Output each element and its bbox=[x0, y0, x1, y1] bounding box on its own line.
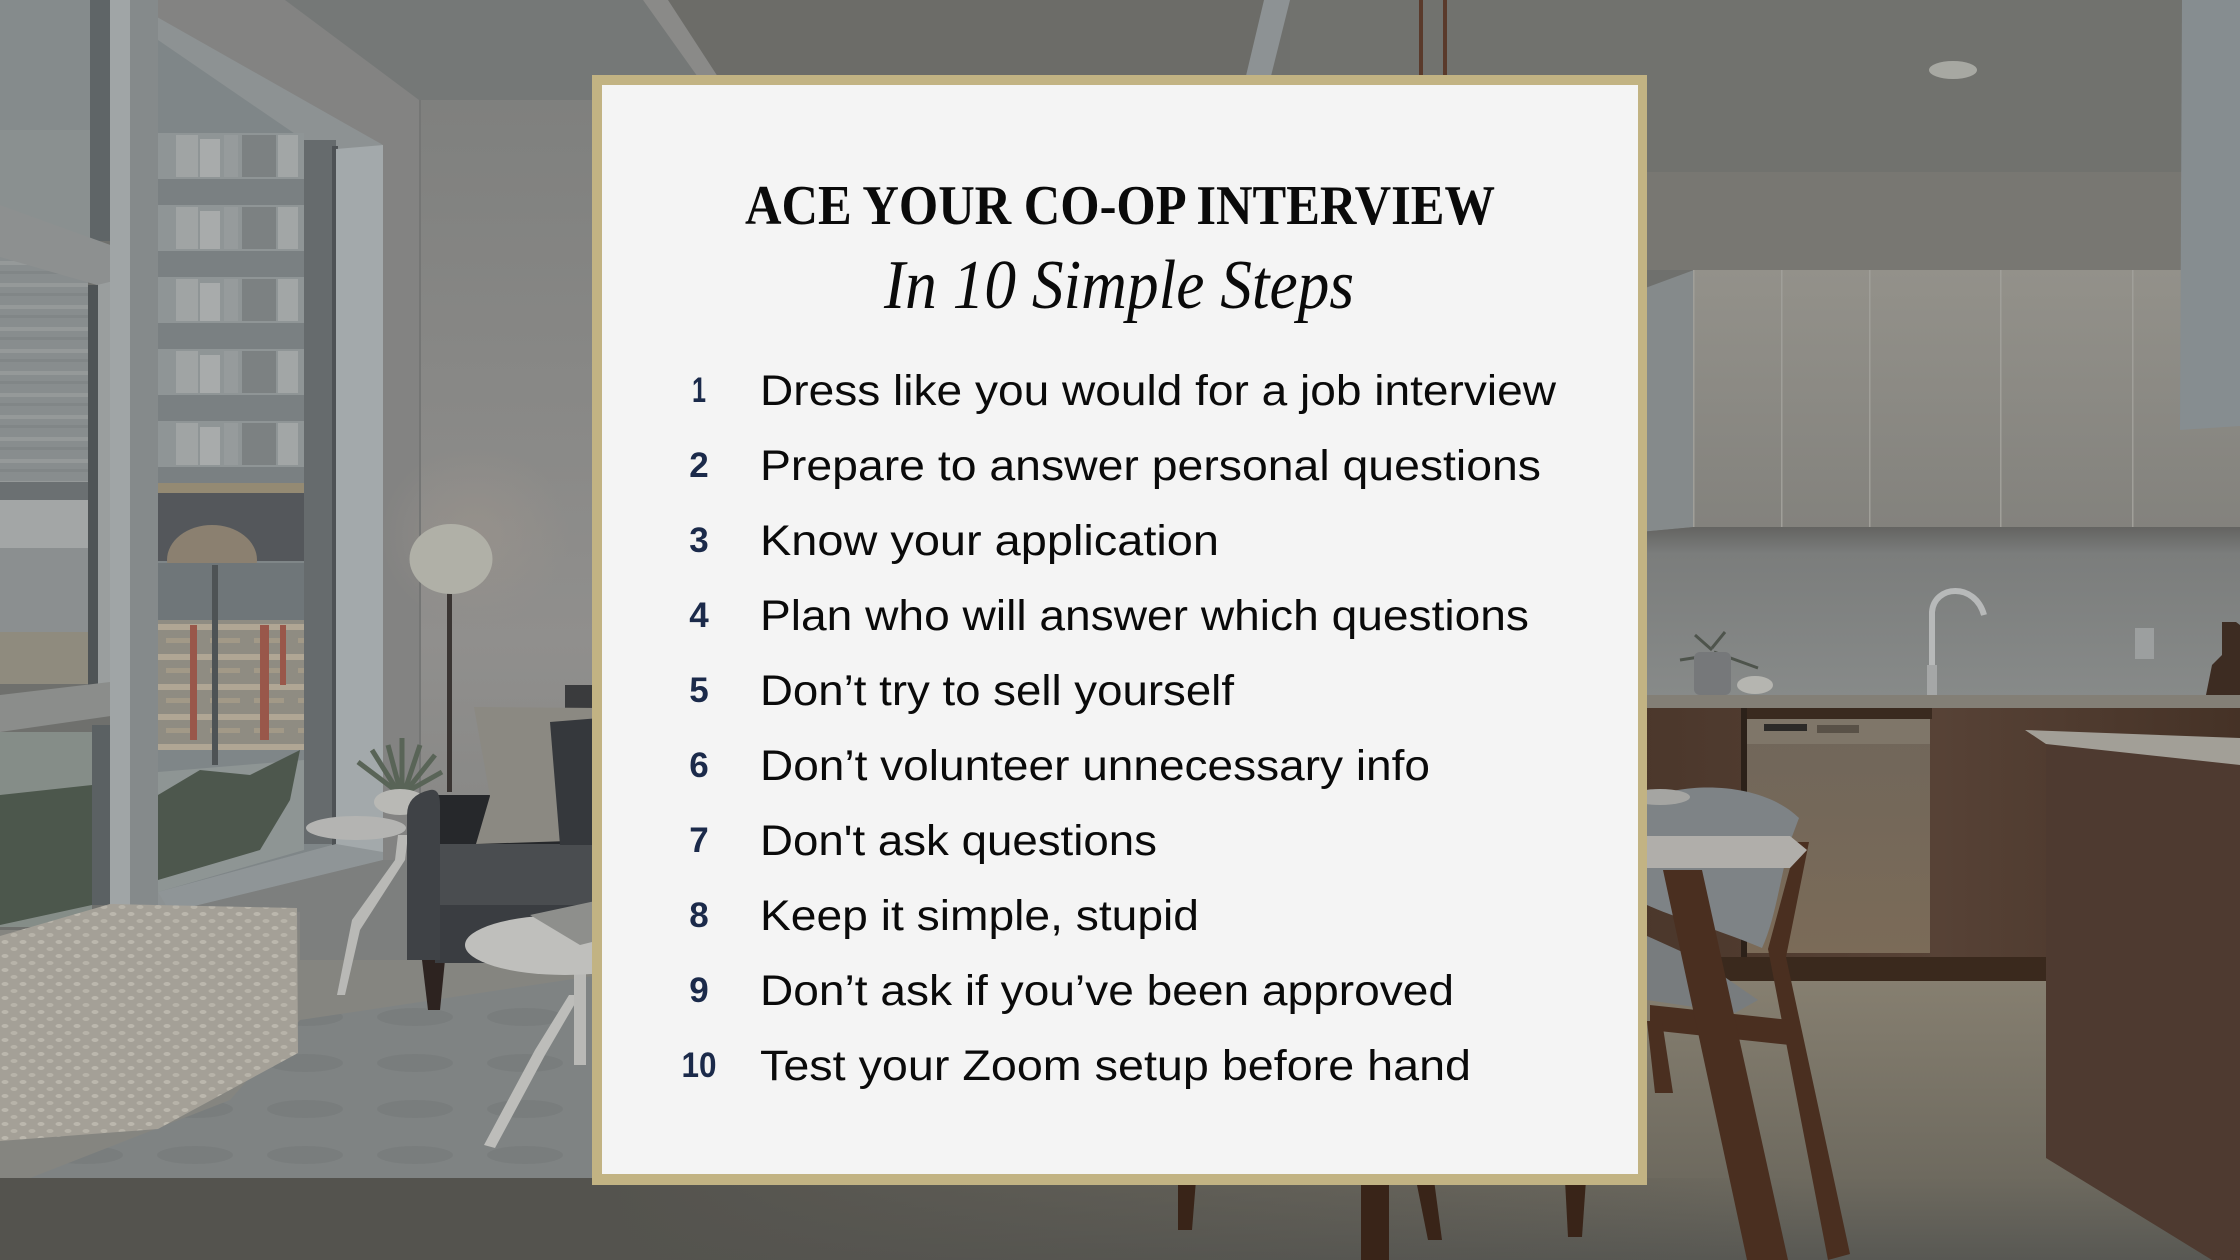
dining chair and table bbox=[1630, 788, 1850, 1260]
dishwasher bbox=[1747, 719, 1930, 953]
step 4: Plan who will answer which questions bbox=[760, 592, 1529, 640]
subtitle: In 10 Simple Steps bbox=[883, 247, 1354, 324]
side table and plant bbox=[306, 738, 442, 995]
upper cabinets bbox=[1640, 270, 2240, 532]
countertop bbox=[1640, 695, 2240, 708]
step 1: 1 bbox=[692, 371, 706, 410]
step 2: Prepare to answer personal questions bbox=[760, 442, 1541, 490]
bottles bbox=[2206, 622, 2240, 695]
outside view through right pane bbox=[158, 40, 338, 892]
step 7: 7 bbox=[689, 821, 709, 860]
pouf bbox=[0, 904, 298, 1141]
step 5: Don’t try to sell yourself bbox=[760, 667, 1235, 715]
pendant light rods bbox=[1419, 0, 1447, 80]
concrete ceiling beam bbox=[643, 0, 1690, 90]
step 8: Keep it simple, stupid bbox=[760, 892, 1199, 940]
panel: checklist card with gold frame bbox=[592, 75, 1647, 1185]
faucet bbox=[1927, 591, 1984, 695]
floor and rug bbox=[0, 930, 700, 1180]
range hood bbox=[2180, 0, 2240, 430]
step 8: 8 bbox=[689, 896, 709, 935]
step 10: Test your Zoom setup before hand bbox=[760, 1042, 1471, 1090]
white window reveal bbox=[336, 145, 383, 860]
step 3: 3 bbox=[689, 521, 709, 560]
base cabinets bbox=[1640, 708, 2240, 981]
potted plant and bowl bbox=[1680, 632, 1773, 695]
step 9: Don’t ask if you’ve been approved bbox=[760, 967, 1454, 1015]
step 5: 5 bbox=[689, 671, 709, 710]
wall outlet bbox=[2135, 628, 2154, 659]
step 6: 6 bbox=[689, 746, 709, 785]
plant bbox=[358, 738, 442, 790]
step 1: Dress like you would for a job interview bbox=[760, 367, 1557, 415]
floor lamp bbox=[410, 524, 492, 792]
large window bbox=[0, 0, 419, 960]
chair legs below the panel bbox=[1178, 1180, 1586, 1260]
step 9: 9 bbox=[689, 971, 709, 1010]
left room: walls and ceiling bbox=[0, 0, 700, 1000]
step 7: Don't ask questions bbox=[760, 817, 1157, 865]
ceiling and recessed light bbox=[1640, 0, 2240, 270]
sofa with pillows bbox=[407, 685, 600, 1010]
step 6: Don’t volunteer unnecessary info bbox=[760, 742, 1430, 790]
backsplash bbox=[1640, 527, 2240, 695]
title: ACE YOUR CO-OP INTERVIEW bbox=[745, 175, 1495, 237]
coffee table bbox=[465, 900, 665, 1148]
island bbox=[2025, 730, 2240, 1260]
kitchen floor bbox=[0, 981, 2240, 1260]
left panes bbox=[0, 0, 158, 927]
step 2: 2 bbox=[689, 446, 709, 485]
step 4: 4 bbox=[689, 596, 709, 635]
step 3: Know your application bbox=[760, 517, 1219, 565]
step 10: 10 bbox=[682, 1046, 716, 1085]
